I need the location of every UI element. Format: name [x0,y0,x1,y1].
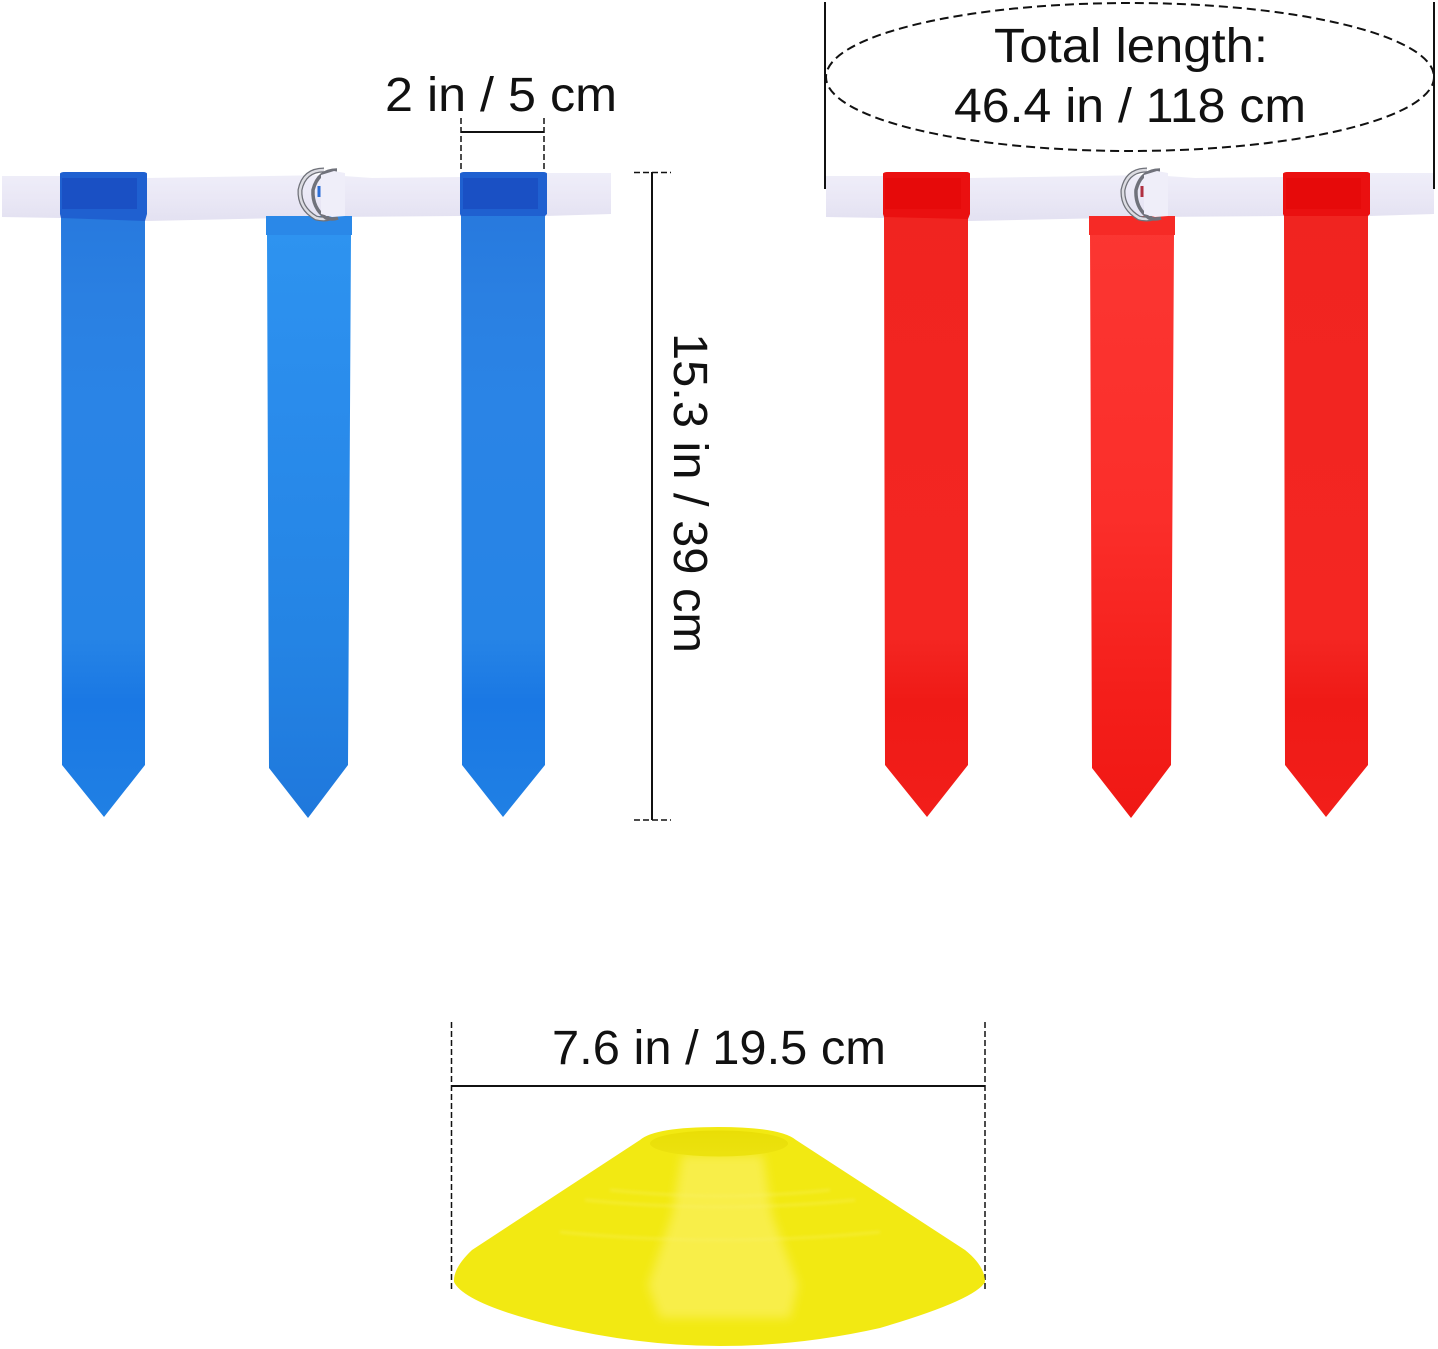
flag length dimension [634,172,716,820]
D-ring buckle [300,170,345,219]
left red flag [883,172,970,817]
total length value: 46.4 in / 118 cm [954,80,1306,133]
dimension lines [825,2,1434,189]
dimension lines [452,1022,985,1292]
center blue flag [266,216,352,818]
D-ring buckle [1123,170,1168,219]
cone ridges [560,1190,880,1240]
right red flag [1283,172,1370,817]
icon: yellow disc cone [454,1127,985,1346]
blue flag belt [2,170,611,818]
cone highlight [648,1155,798,1318]
white belt [826,173,1434,221]
red flag belt [826,170,1434,818]
center red flag [1089,216,1175,818]
dashed ellipse [826,3,1434,151]
total length label: Total length: [994,20,1268,73]
flag width dimension [385,69,617,172]
cone width label: 7.6 in / 19.5 cm [552,1022,886,1075]
cone dimension [452,1022,985,1292]
total length callout [825,2,1434,189]
dimension lines [634,172,671,820]
dimension lines [461,118,544,172]
right blue flag [460,172,547,817]
flag length label: 15.3 in / 39 cm [663,333,716,653]
left blue flag [60,172,147,817]
white belt [2,173,611,221]
flag width label: 2 in / 5 cm [385,69,617,122]
cone opening [650,1130,788,1156]
